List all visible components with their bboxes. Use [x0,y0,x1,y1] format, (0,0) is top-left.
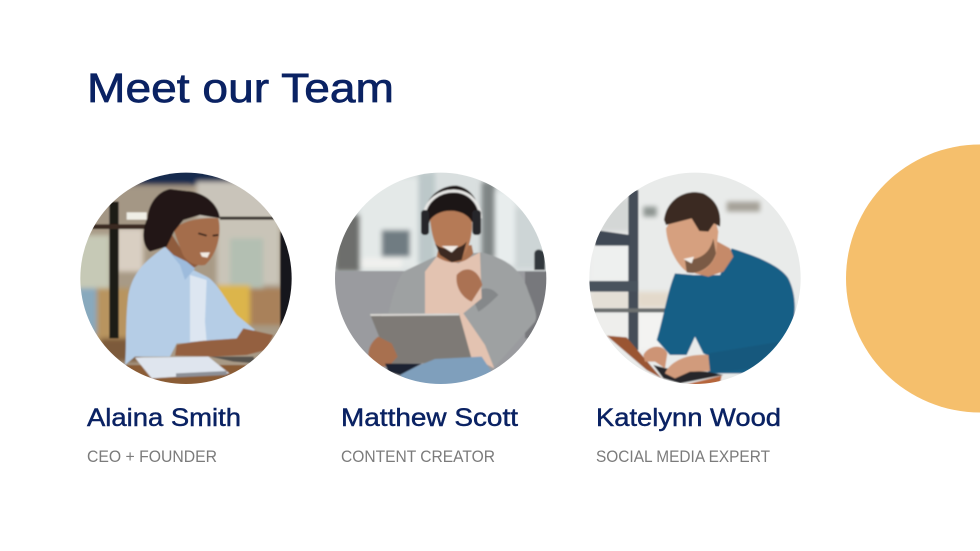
decorative orange circle [846,144,980,412]
face [174,218,220,265]
hair [664,192,720,232]
team member: Matthew Scott [335,172,546,462]
hair [426,184,478,224]
neck [695,238,733,277]
documents [135,357,229,378]
face [666,212,718,273]
title: Meet our Team [87,65,394,111]
table [126,364,247,384]
neck [165,235,198,268]
photo: man with headphones and tablet [335,172,546,384]
photo: man in teal sweater at laptop [589,172,800,384]
team member: Alaina Smith [80,172,292,462]
t-shirt [425,252,494,368]
sofa [336,270,546,274]
shirt [125,247,255,365]
name: Alaina Smith [87,404,241,432]
jeans [400,356,492,384]
sweater [657,248,795,373]
arm [175,328,273,357]
hair [143,189,220,252]
fist [456,269,482,302]
role: CONTENT CREATOR [341,447,495,466]
hand [368,337,398,367]
role: CEO + FOUNDER [87,447,217,466]
photo: woman in blue shirt at laptop [80,172,292,384]
name: Matthew Scott [341,404,518,432]
neck [437,245,473,263]
name: Katelynn Wood [596,404,781,432]
cardigan [405,252,536,333]
face [430,210,472,262]
tablet [370,313,473,364]
headphones [424,191,481,218]
laptop [607,336,662,378]
role: SOCIAL MEDIA EXPERT [596,447,770,466]
team member: Katelynn Wood [589,172,800,462]
hands [643,347,667,368]
shelving [628,190,638,350]
